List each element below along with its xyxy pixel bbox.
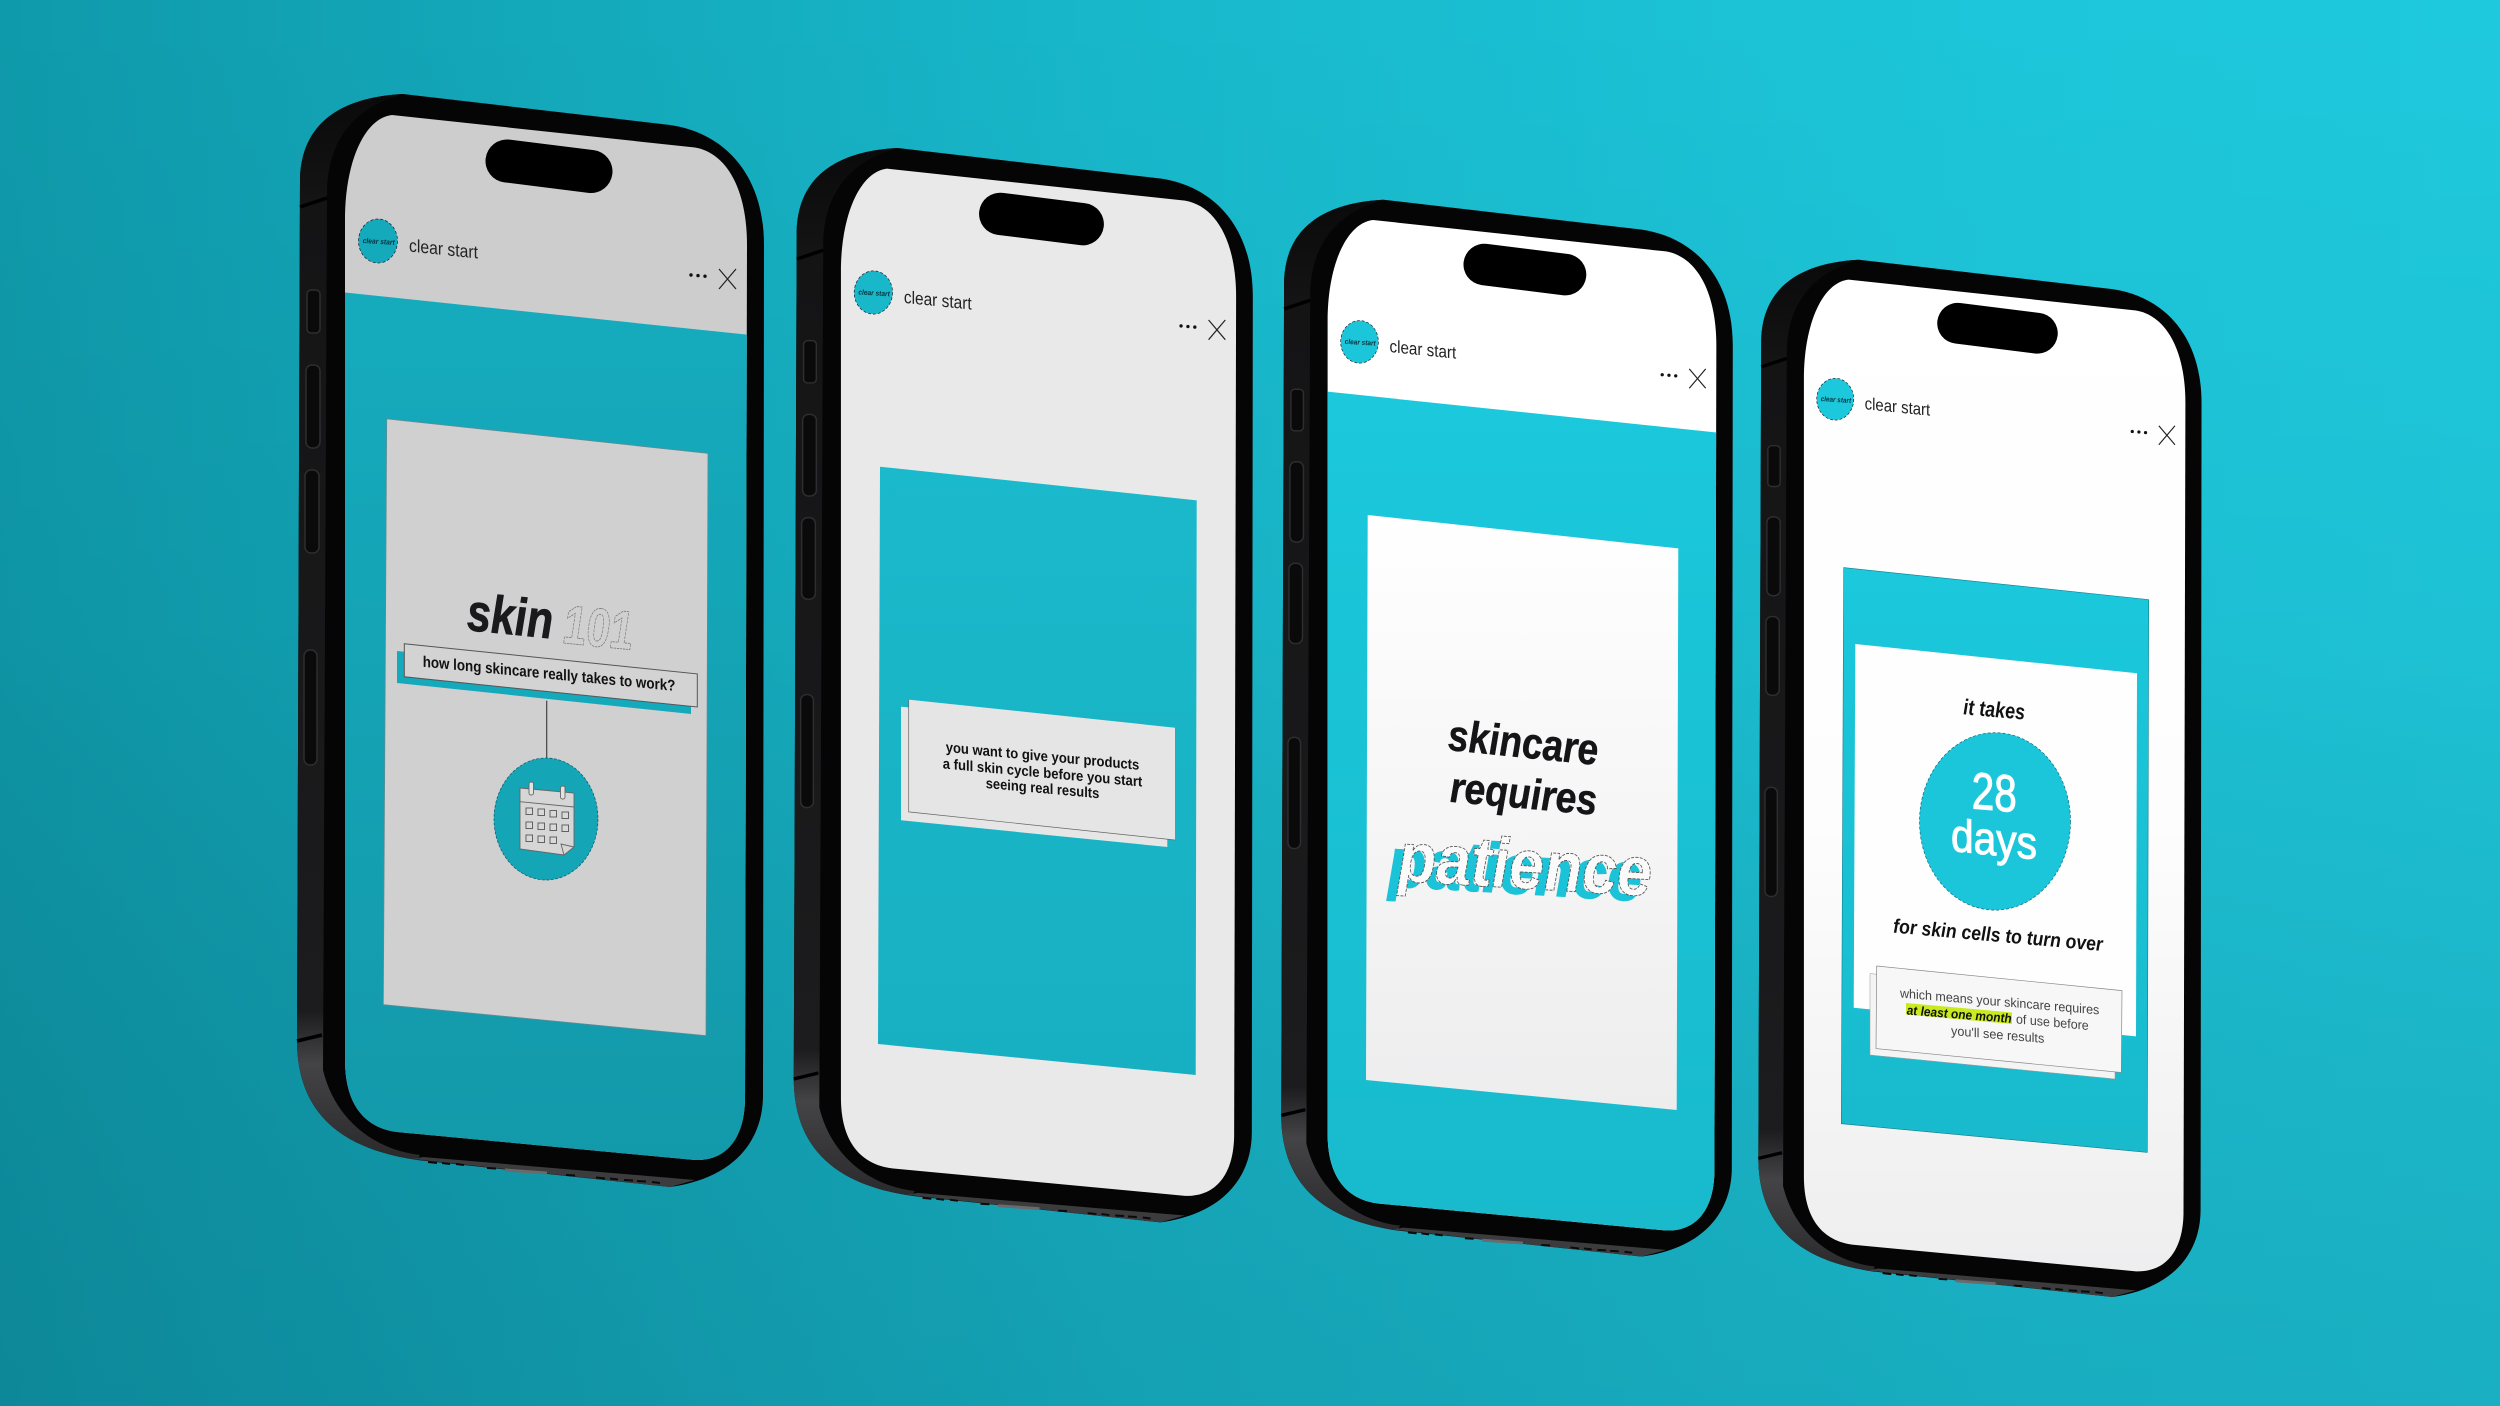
card: 28 days: it takes bbox=[1963, 694, 2025, 725]
card: 28 days: for skin cells to turn over bbox=[1893, 916, 2104, 956]
card: patience: patience bbox=[1386, 823, 1642, 917]
phone 1: skin 101 bbox=[297, 94, 764, 1187]
phone 3: skincare requires patience: clear start bbox=[1345, 337, 1376, 348]
phone 1: skin 101: clear start bbox=[409, 236, 478, 262]
card: skin cycle message: you want to give your products bbox=[946, 740, 1139, 774]
phone 2: full skin cycle: clear start bbox=[858, 287, 890, 298]
phone 4: it takes 28 days bbox=[1758, 260, 2202, 1297]
card: skin 101 bbox=[383, 419, 708, 1036]
card: patience: patience bbox=[1396, 818, 1652, 912]
callout: at least one month: of use before bbox=[2016, 1011, 2089, 1033]
phone 4: it takes 28 days: clear start bbox=[1865, 394, 1930, 420]
callout: at least one month: at least one month bbox=[1907, 1003, 2012, 1026]
card: 28 days: 28 bbox=[1972, 762, 2017, 824]
card: skin cycle message: a full skin cycle before you start bbox=[943, 756, 1142, 791]
callout: at least one month bbox=[1870, 966, 2122, 1079]
card: skin 101: 101 bbox=[563, 593, 633, 662]
phone 3: skincare requires patience: clear start bbox=[1390, 336, 1456, 363]
icon: calendar bbox=[520, 782, 574, 855]
callout: at least one month: you'll see results bbox=[1951, 1023, 2045, 1046]
card: 28 days: days bbox=[1951, 809, 2037, 869]
phone 2: full skin cycle: clear start bbox=[904, 287, 972, 314]
card: skin cycle message: seeing real results bbox=[986, 776, 1099, 802]
phone 4: it takes 28 days: clear start bbox=[1821, 395, 1852, 405]
callout: at least one month: which means your skincare requires bbox=[1899, 985, 2100, 1017]
card: 28 days bbox=[1841, 568, 2149, 1152]
card: skin 101: skin bbox=[467, 583, 553, 651]
card: patience: requires bbox=[1450, 764, 1597, 825]
phone 1: skin 101: clear start bbox=[363, 236, 395, 247]
phone 3: skincare requires patience bbox=[1281, 200, 1733, 1257]
card: skin cycle message bbox=[878, 467, 1197, 1075]
card: patience: skincare bbox=[1448, 711, 1598, 775]
card: patience bbox=[1366, 515, 1678, 1110]
phone 2: full skin cycle bbox=[794, 148, 1253, 1222]
card: skin 101: how long skincare really takes to work? bbox=[423, 654, 675, 695]
